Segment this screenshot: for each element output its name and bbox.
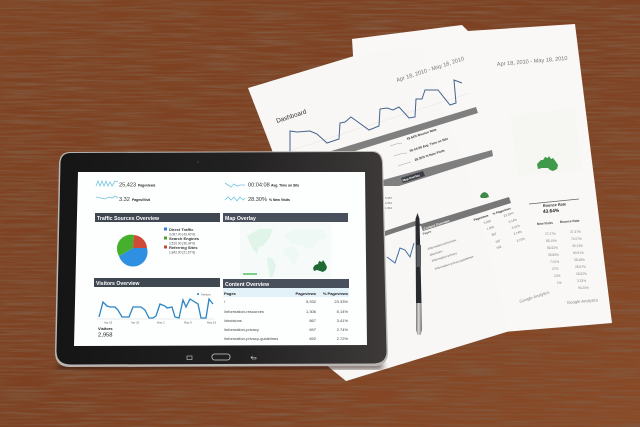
legend text on paper: 1,842 [385,206,392,210]
content table on paper: Pageviews [473,213,489,222]
gray section bar two [383,150,493,186]
small map marker on paper [480,192,489,198]
pen [416,213,422,335]
metric: pageviews [96,181,155,188]
pie legend: Search Engines [169,236,200,241]
right-hand table: 3.33% [577,279,586,283]
content table on paper: 1,306 [486,225,495,231]
summary metrics on paper: 00:04:08 Avg. Time on Site [409,137,449,153]
table header: Pages [224,291,237,296]
metric: pages per visit: Pages/Visit [132,198,151,202]
right-hand table: New Visits [537,221,553,226]
summary metrics on paper: 28.30% % New Visits [414,148,445,162]
pie legend: Referring Sites [169,245,198,250]
right-hand table: 60.91% [573,251,584,255]
visitors count: Visitors [98,326,113,331]
content overview label on paper: Content Overview [423,219,451,231]
content table on paper: 2.74% [513,229,523,236]
metric: new visits: 28.30% [248,197,267,203]
content table on paper: Pages [422,229,432,236]
visitors line chart: Apr 18 [104,320,113,324]
right-hand table: 35.85% [548,253,559,257]
camera dot [197,161,199,163]
visitors legend: Visitors [201,292,211,296]
content table on paper: /information-privacy [431,251,458,263]
content table on paper [422,206,526,271]
line chart on paper [289,80,470,152]
pie legend: 2,510.00 (36.34%) [169,242,195,246]
map: Australia on back sheet [510,108,582,176]
right-hand table: 38.46% [574,258,585,262]
gray section bar three [385,197,511,236]
pie legend: Direct Traffic [169,227,194,232]
content table on paper: 867 [491,231,497,237]
metric: pages per visit: 3.32 [119,197,130,203]
table rows: / [224,299,226,304]
right-hand table: 1% [557,281,562,285]
summary metrics on paper [390,127,449,166]
content table on paper: % Pageviews [492,206,512,216]
right-hand table: 85.19% [546,239,557,243]
table rows: /information-resources [224,309,264,314]
right-hand table: 90.20% [578,286,589,290]
summary metrics on paper: 43.64% Bounce Rate [406,127,437,141]
content table on paper: 5.14% [508,217,518,224]
table rows: 2.74% [337,327,348,332]
table rows: 697 [309,327,317,332]
header date on back sheet: Apr 18, 2010 - May 18, 2010 [497,56,568,68]
right-hand table: 18.52% [576,272,587,276]
content table on paper: 692 [496,244,502,250]
visitors count [98,326,113,338]
map overlay label on paper [401,171,425,183]
table rows: 867 [309,318,317,323]
right-hand table: 56.52% [547,246,558,250]
right-hand table: 47.37% [570,230,581,234]
map legend [243,273,257,275]
visitors line chart: May 9 [184,320,192,324]
right-hand table: 28.57% [575,265,586,269]
screen [74,172,367,346]
content table on paper: 2.72% [516,236,526,243]
panel: map overlay [223,213,348,278]
bounce rate summary [529,199,579,215]
panel: content overview [223,279,349,341]
bounce rate summary: 43.64% [543,208,560,215]
table rows [224,299,348,341]
content table on paper: /information-privacy-guidelines [434,254,474,271]
visitors count: 2,958 [98,332,113,338]
metric: average time on site: Avg. Time on Site [271,184,299,188]
metric: new visits [225,197,290,203]
content table on paper: 23.33% [503,211,514,218]
content table on paper: 5,932 [483,219,492,225]
metric: pageviews: Pageviews [138,184,155,188]
heading: Map Overlay [225,216,256,222]
heading: Visitors Overview [96,281,140,287]
pie chart [117,235,148,267]
paper: dashboard report sheet [248,45,550,381]
bounce rate summary: Bounce Rate [543,202,566,208]
visitors line chart: Apr 25 [131,320,140,324]
content table on paper: /information-resources [427,238,457,251]
tablet navigation buttons [187,354,256,360]
table rows: 3.41% [337,318,348,323]
heading: Traffic Sources Overview [97,216,160,222]
content table on paper: 3.41% [511,223,521,230]
dashboard heading: Dashboard [275,108,308,125]
panel: traffic sources overview [95,213,220,267]
table rows: /information-privacy-guidelines [224,336,278,341]
world map [240,223,331,278]
pie legend: 3,087.00 (43.40%) [169,232,195,236]
table header: Pageviews [296,291,317,296]
right-hand table [537,219,589,290]
legend text on paper [385,196,392,210]
visitors line chart [97,299,217,324]
right-hand table: 27.27% [545,232,556,236]
content table on paper: 697 [495,238,501,244]
table rows: 692 [309,336,317,341]
metric: pageviews: 25,423 [119,182,136,188]
tablet shadow [58,363,383,369]
Australia highlight [313,260,327,272]
tablet frame [55,151,388,367]
table rows: 1,306 [306,309,317,314]
table rows: 5.14% [337,309,348,314]
heading: Content Overview [225,282,270,288]
table rows: /information-privacy [224,327,259,332]
panel: visitors overview [94,278,220,338]
metric: pages per visit [96,196,151,203]
table rows: 2.72% [337,336,348,341]
map overlay label on paper: Map Overlay [402,173,421,182]
pie legend: 1,842.00 (21.67%) [169,250,195,254]
right-hand table: 13% [554,274,561,278]
right-hand table: 27% [552,267,559,271]
metric: average time on site: 00:04:08 [248,182,270,188]
metric: average time on site [225,182,299,188]
gray section bar one [328,107,478,152]
right-hand table: Bounce Rate [560,219,580,224]
right-hand table: 39.13% [572,244,583,248]
table header [223,288,349,297]
table rows: 23.33% [334,299,348,304]
pie legend [164,227,200,254]
table rows: 5,932 [306,299,317,304]
right-hand table: 7.01% [550,260,559,264]
metric: new visits: % New Visits [269,198,290,202]
visitors line chart: May 2 [157,320,165,324]
table header: % Pageviews [323,291,349,296]
tablet [55,151,388,367]
footer: Google Analytics right: Google Analytics [567,297,598,305]
paper: back report sheet [338,24,612,381]
content table on paper: /decisions [429,249,443,257]
legend text on paper: 5,087 [385,196,392,200]
date range heading: Apr 18, 2010 - May 18, 2010 [396,56,465,84]
tablet chart copy on paper [387,243,414,263]
table rows: /decisions [224,318,242,323]
footer: Google Analytics left: Google Analytics [519,290,550,304]
right-hand table: 74.07% [571,237,582,241]
legend text on paper: 2,510 [385,201,392,205]
visitors line chart: May 16 [207,320,217,324]
